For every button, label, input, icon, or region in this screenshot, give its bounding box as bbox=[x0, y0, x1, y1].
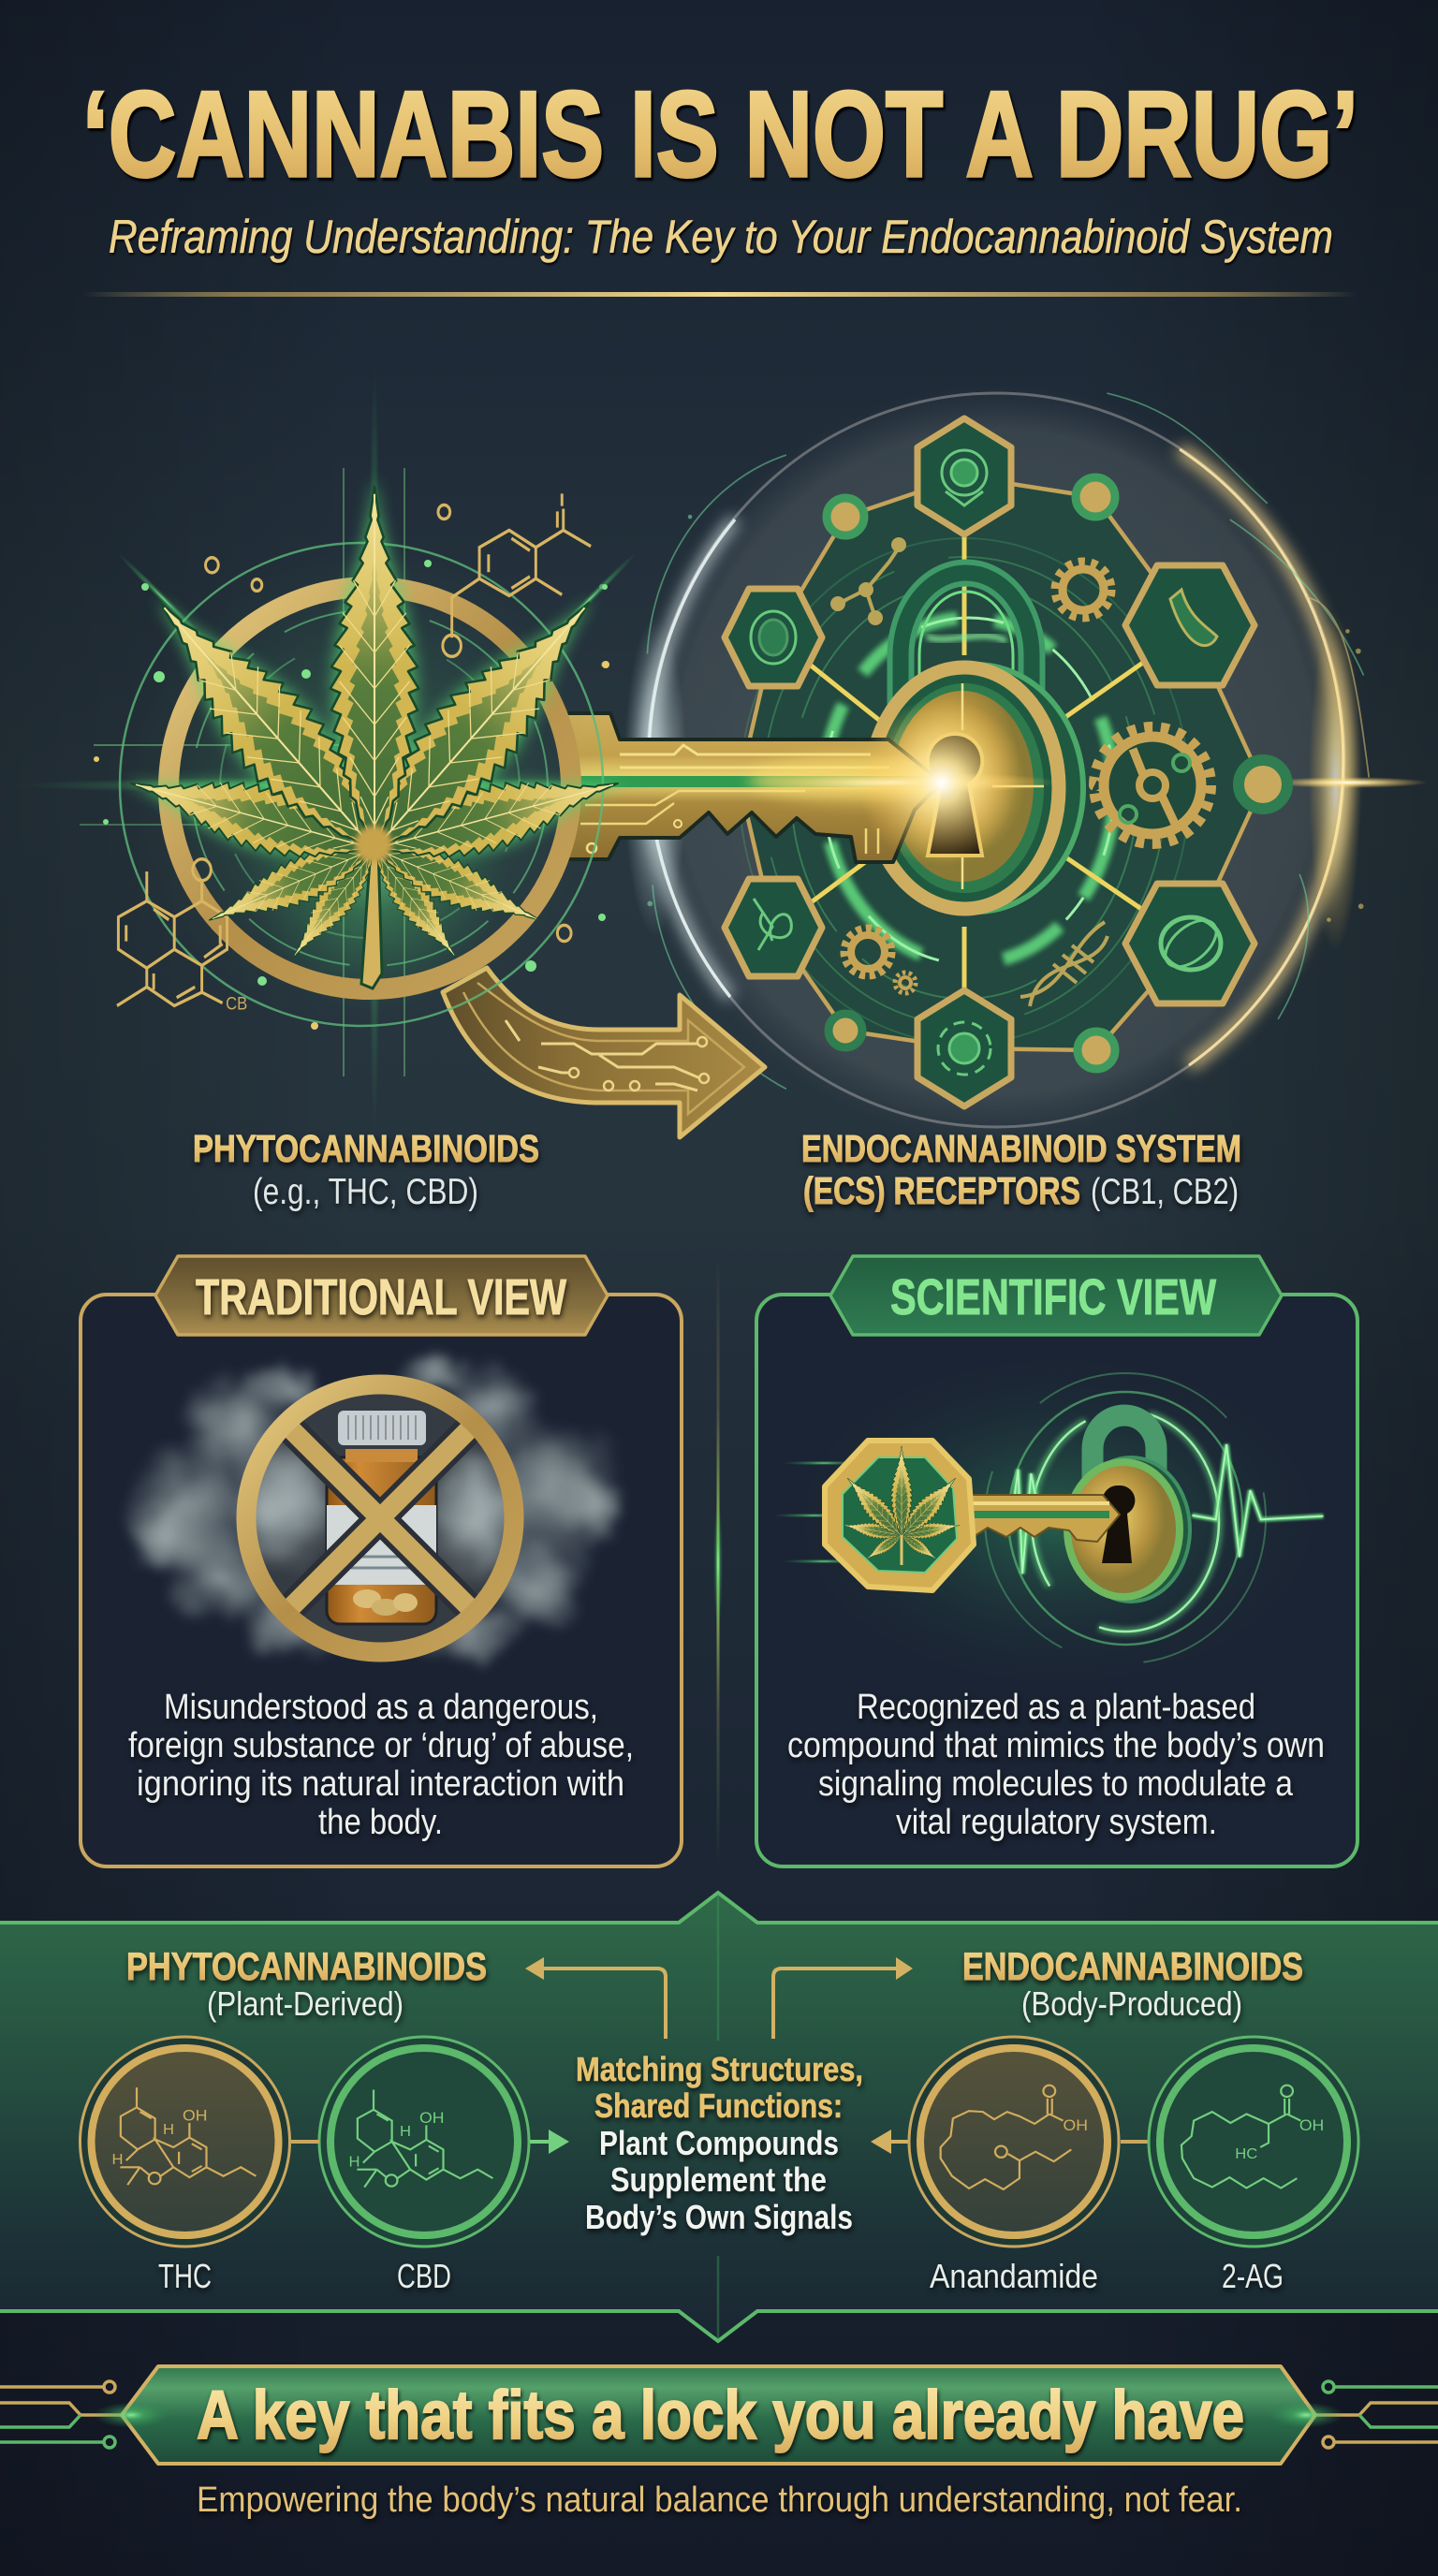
compound labels: CBD bbox=[397, 2257, 451, 2295]
molecule: THC bbox=[112, 2087, 256, 2185]
green swirl bbox=[740, 538, 1189, 1044]
golden key bbox=[566, 698, 1058, 867]
hexagon nodes bbox=[725, 418, 1255, 1106]
text: traditional description: ignoring its natural interaction with bbox=[137, 1764, 624, 1804]
text: scientific description: signaling molecules to modulate a bbox=[818, 1764, 1294, 1804]
gold ring bbox=[169, 587, 571, 989]
keyhole bbox=[928, 734, 982, 856]
molecule: anandamide: OH bbox=[1063, 2115, 1088, 2134]
heading: phytocannabinoids: PHYTOCANNABINOIDS bbox=[126, 1944, 487, 1988]
circle: CBD bbox=[319, 2037, 529, 2247]
hero illustration: plant bbox=[14, 365, 707, 1133]
heading: phytocannabinoids bbox=[126, 1944, 487, 2023]
arrow: curved circuit arrow bbox=[443, 968, 765, 1137]
banner: key message bbox=[94, 2366, 1343, 2464]
icon: smoke cloud bbox=[124, 1351, 631, 1661]
text: traditional description: the body. bbox=[318, 1803, 443, 1842]
halo bbox=[599, 385, 1428, 1141]
shackle bbox=[901, 573, 1032, 730]
circuit lines left bbox=[0, 2381, 122, 2448]
small key bbox=[964, 1495, 1120, 1543]
arrow: anandamide to centre bbox=[871, 2130, 908, 2154]
icon: chemical structures bbox=[117, 493, 591, 1014]
text: scientific description: compound that mimics the body’s own bbox=[787, 1726, 1325, 1765]
molecule: 2-AG bbox=[1181, 2086, 1324, 2188]
heading: phytocannabinoids: (Plant-Derived) bbox=[207, 1984, 404, 2023]
text: matching structures: Supplement the bbox=[610, 2160, 827, 2199]
molecule: CBD: OH bbox=[419, 2108, 444, 2127]
text: matching structures: Plant Compounds bbox=[599, 2124, 839, 2162]
molecule: THC: H bbox=[163, 2121, 174, 2138]
compound labels: Anandamide bbox=[930, 2257, 1098, 2295]
text: matching structures bbox=[576, 2050, 863, 2236]
panel: scientific view bbox=[756, 1256, 1357, 1866]
network base bbox=[740, 476, 1263, 1050]
heading: endocannabinoids bbox=[962, 1944, 1303, 2023]
lock body bbox=[868, 665, 1083, 912]
text: traditional description: Misunderstood as a dangerous, bbox=[164, 1688, 598, 1727]
label: ECS receptors: ENDOCANNABINOID SYSTEM bbox=[801, 1127, 1241, 1170]
molecule: CBD bbox=[349, 2089, 492, 2188]
circuit lines right bbox=[1315, 2381, 1438, 2448]
hero illustration: ECS lock network bbox=[599, 385, 1428, 1141]
molecule: 2-AG: OH bbox=[1299, 2115, 1324, 2134]
text: matching structures: Matching Structures, bbox=[576, 2050, 863, 2088]
compound labels bbox=[158, 2257, 1284, 2295]
pulse line bbox=[984, 1444, 1323, 1573]
panel: traditional view bbox=[81, 1256, 682, 1866]
molecule: THC: H bbox=[112, 2151, 124, 2168]
banner: key message: A key that fits a lock you already have bbox=[197, 2378, 1244, 2453]
label: phytocannabinoids: PHYTOCANNABINOIDS bbox=[193, 1127, 539, 1170]
text: scientific description bbox=[787, 1688, 1325, 1842]
arrow: to endocannabinoids bbox=[773, 1957, 913, 2039]
divider bbox=[82, 292, 1357, 297]
banner: traditional view: TRADITIONAL VIEW bbox=[196, 1269, 566, 1325]
rays bbox=[810, 534, 1147, 990]
molecule: 2-AG: HC bbox=[1235, 2145, 1257, 2162]
icon: prohibited pill bottle bbox=[227, 1384, 536, 1652]
circle: 2-AG bbox=[1149, 2037, 1358, 2247]
label: ECS receptors: (ECS) RECEPTORS bbox=[803, 1169, 1080, 1212]
label: ECS receptors: (CB1, CB2) bbox=[1091, 1172, 1239, 1212]
compound labels: 2-AG bbox=[1222, 2257, 1284, 2295]
icon: cannabis leaf bbox=[116, 477, 633, 988]
molecule: anandamide bbox=[941, 2086, 1088, 2189]
compound labels: THC bbox=[158, 2257, 212, 2295]
icon: chemical structures: CB bbox=[226, 993, 247, 1014]
banner: traditional view bbox=[155, 1256, 608, 1335]
small gears bbox=[844, 562, 1111, 993]
label: ECS receptors bbox=[801, 1127, 1241, 1212]
banner: scientific view: SCIENTIFIC VIEW bbox=[890, 1269, 1216, 1325]
label: phytocannabinoids: (e.g., THC, CBD) bbox=[253, 1172, 478, 1212]
molecule: CBD: H bbox=[349, 2154, 360, 2170]
wisps bbox=[599, 393, 1369, 1089]
central vertical divider bbox=[713, 1259, 723, 1867]
connector: anandamide to 2-AG bbox=[1121, 2140, 1149, 2144]
tagline: Empowering the body’s natural balance through understanding, not fear. bbox=[197, 2481, 1242, 2520]
heading: endocannabinoids: ENDOCANNABINOIDS bbox=[962, 1944, 1303, 1988]
hexagon icons bbox=[751, 450, 1225, 1075]
heading: endocannabinoids: (Body-Produced) bbox=[1021, 1984, 1242, 2023]
molecule: CBD: H bbox=[400, 2123, 411, 2140]
small leaf bbox=[840, 1446, 963, 1565]
leaf glow bbox=[116, 477, 633, 880]
circle: anandamide bbox=[909, 2037, 1119, 2247]
arrow: to phytocannabinoids bbox=[525, 1957, 666, 2039]
text: scientific description: Recognized as a plant-based bbox=[857, 1688, 1255, 1727]
small shackle bbox=[1093, 1415, 1156, 1488]
text: matching structures: Shared Functions: bbox=[594, 2086, 843, 2125]
circle: THC bbox=[81, 2037, 290, 2247]
small lock body bbox=[1072, 1457, 1190, 1602]
banner: scientific view bbox=[830, 1256, 1282, 1335]
label: phytocannabinoids bbox=[193, 1127, 539, 1212]
text: matching structures: Body’s Own Signals bbox=[585, 2198, 853, 2236]
icon: key and lock with pulse bbox=[772, 1343, 1339, 1699]
connector: THC to CBD bbox=[291, 2140, 319, 2144]
pill bottle bbox=[327, 1411, 436, 1624]
particles bbox=[94, 560, 609, 1030]
circular nodes bbox=[827, 477, 1287, 1069]
text: traditional description: foreign substance or ‘drug’ of abuse, bbox=[128, 1726, 634, 1765]
plant glow bbox=[14, 365, 707, 1133]
text: traditional description bbox=[128, 1688, 634, 1842]
large gear bbox=[1094, 727, 1211, 843]
DNA and molecule icons bbox=[832, 539, 1108, 1006]
arrow: CBD to centre bbox=[530, 2130, 569, 2154]
text: scientific description: vital regulatory system. bbox=[896, 1803, 1217, 1842]
panel: molecular comparison band bbox=[0, 1893, 1438, 2341]
molecule: THC: OH bbox=[183, 2106, 207, 2125]
thin green rings bbox=[120, 543, 603, 1026]
